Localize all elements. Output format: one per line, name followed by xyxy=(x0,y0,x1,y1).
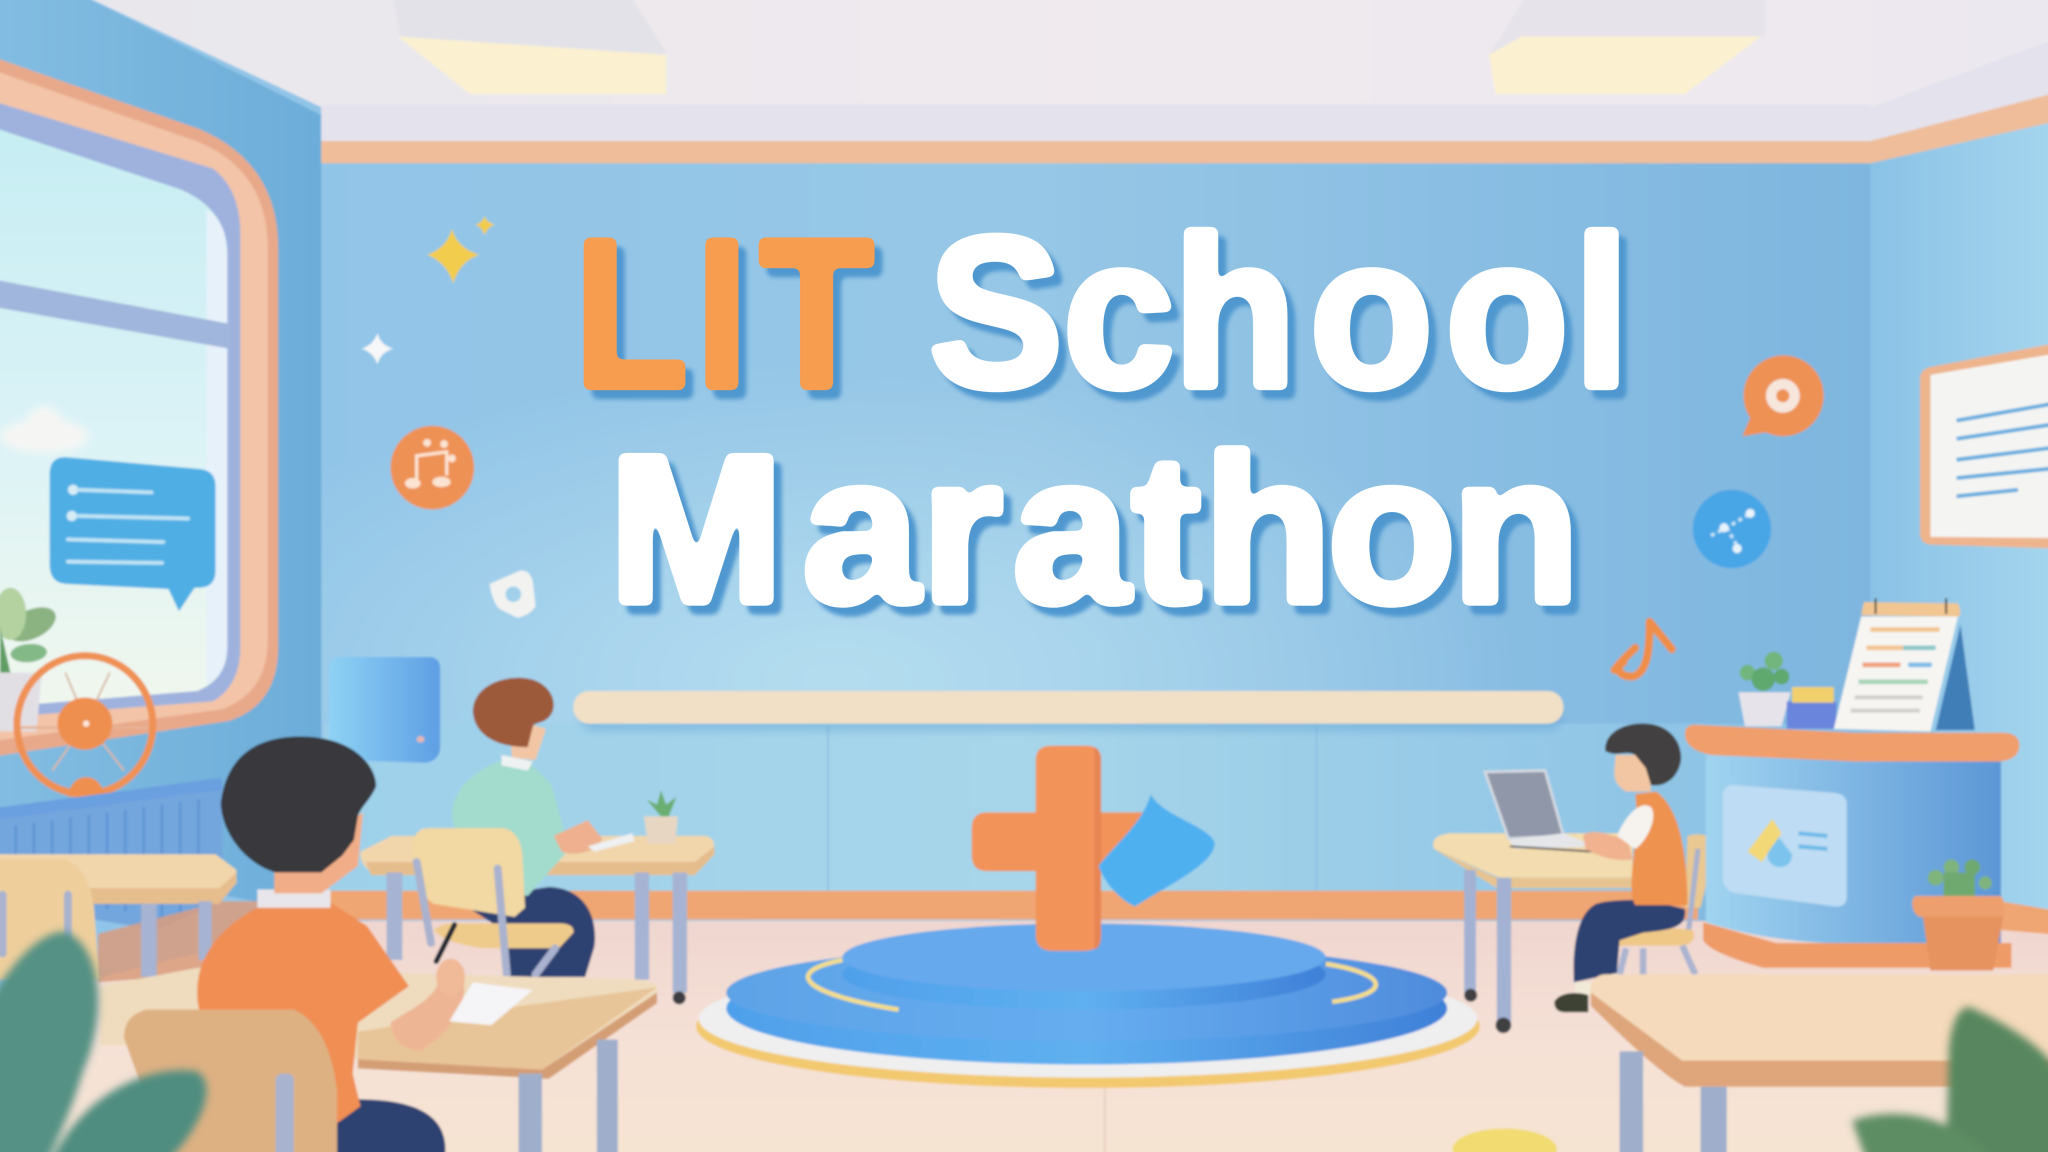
ceiling trim xyxy=(321,91,2048,163)
back student chair xyxy=(413,828,574,974)
skirting board xyxy=(327,891,2048,935)
window xyxy=(0,55,278,758)
laptop xyxy=(1485,771,1596,852)
icon: blue nodes badge xyxy=(1693,490,1771,568)
floor xyxy=(0,921,2048,1152)
right student chair xyxy=(1609,834,1716,974)
counter sign xyxy=(1723,785,1847,907)
right wall xyxy=(1870,111,2048,953)
yellow ball xyxy=(1452,1128,1557,1152)
foreground right desk xyxy=(1590,974,2048,1152)
reception counter xyxy=(1685,725,2019,968)
blue wall panel xyxy=(329,657,440,763)
flip calendar xyxy=(1834,598,1975,731)
sparkle large xyxy=(427,229,479,283)
foreground right leaf xyxy=(1852,1007,2048,1152)
ceiling xyxy=(65,0,2048,141)
foreground left leaves xyxy=(0,932,207,1152)
icon: white ring xyxy=(490,571,536,618)
title word: LIT: LIT xyxy=(574,197,873,432)
wall whiteboard xyxy=(1920,342,2048,549)
back student desk xyxy=(360,790,714,1004)
icon: orange chat ring xyxy=(1742,355,1824,436)
ceiling light right xyxy=(1489,0,1766,94)
icon: music badge xyxy=(391,426,474,509)
icon: orange music note xyxy=(1614,622,1672,677)
counter plant xyxy=(1738,652,1791,726)
left wall xyxy=(0,0,321,914)
podium xyxy=(696,923,1480,1088)
back student xyxy=(452,678,635,977)
cloud xyxy=(0,406,89,453)
foreground chair xyxy=(124,1010,337,1152)
foreground student xyxy=(197,736,533,1152)
right student desk xyxy=(1433,771,1633,1033)
left back desk xyxy=(0,854,236,980)
blue wedge xyxy=(1098,794,1215,906)
wall rail xyxy=(573,691,1563,731)
ceiling light left xyxy=(392,0,666,94)
title word: School: School xyxy=(928,193,1630,433)
radiator xyxy=(0,784,222,930)
terracotta plant xyxy=(1912,859,2004,970)
plus sign xyxy=(972,746,1143,951)
foreground left desk xyxy=(101,968,658,1152)
right student xyxy=(1554,723,1688,1012)
speech bubble xyxy=(50,457,216,611)
title xyxy=(574,193,1630,647)
title word: Marathon: Marathon xyxy=(608,410,1580,647)
counter blocks xyxy=(1787,687,1836,729)
sparkle small xyxy=(475,216,495,235)
window plant xyxy=(0,588,61,731)
potted plant xyxy=(644,790,678,844)
orange wheel xyxy=(17,656,154,797)
sparkle white xyxy=(362,333,393,364)
notebook xyxy=(449,982,533,1025)
